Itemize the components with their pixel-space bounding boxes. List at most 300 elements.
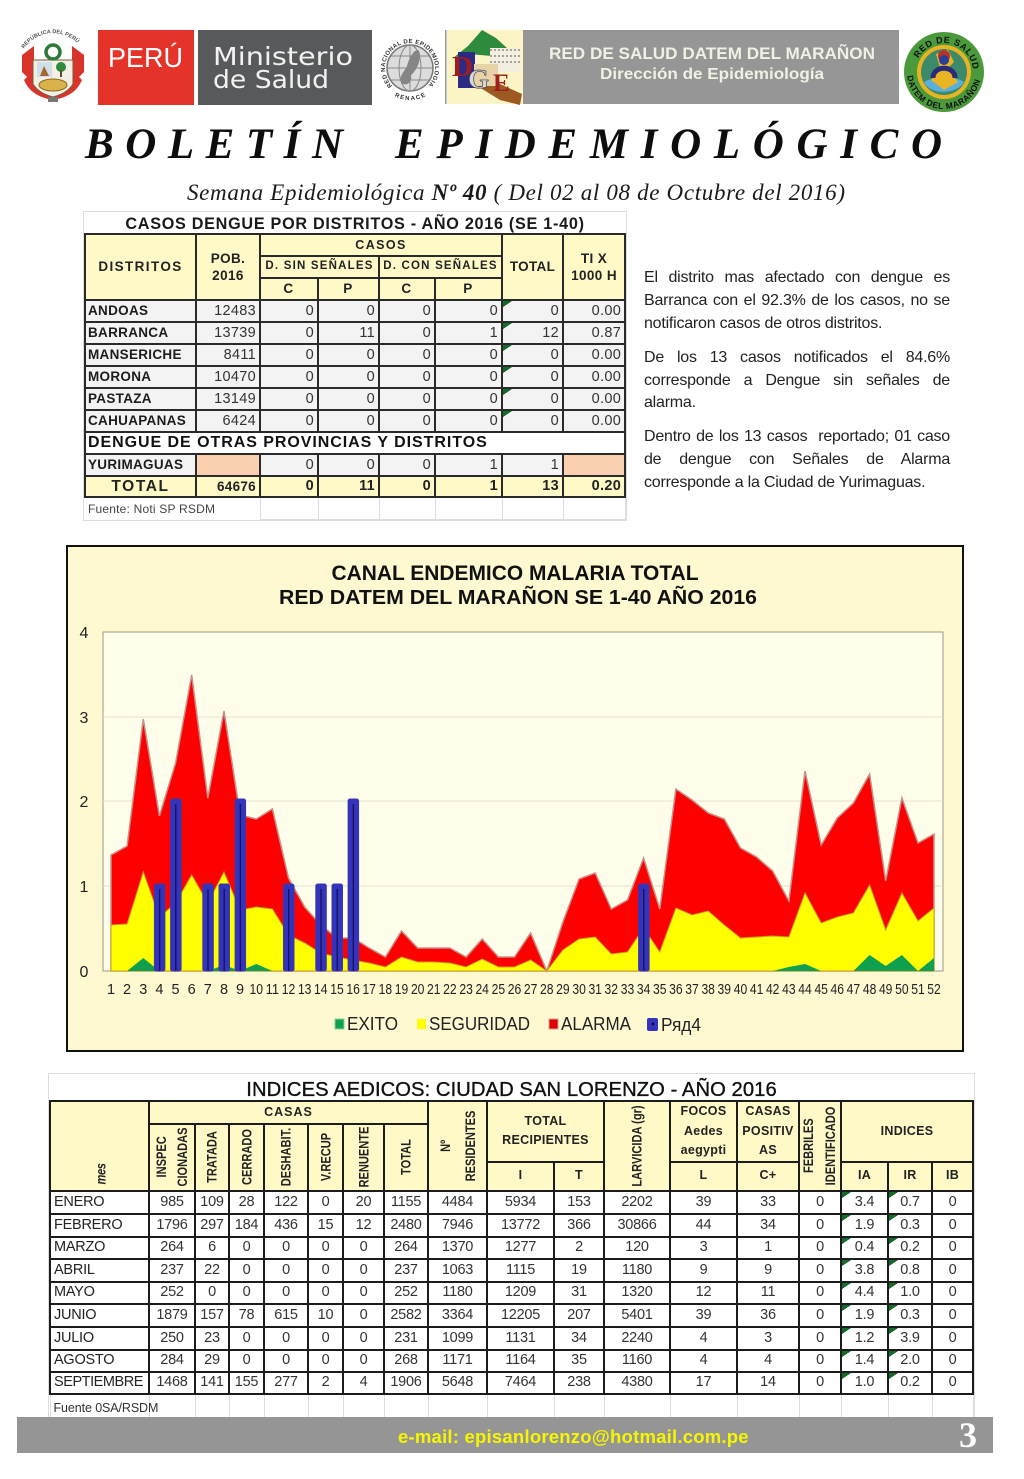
text block: dengue summary: Barranca con el 92.3% de los casos, no se [644, 292, 950, 309]
row: Pastaza: 0 [306, 391, 314, 407]
row: Febrero: 184 [235, 1217, 258, 1233]
row: Yurimaguas: 0 [367, 457, 375, 473]
row: Enero: 20 [356, 1194, 371, 1210]
source note: Fuente 0SA/RSDM [54, 1401, 158, 1415]
row: Julio: 3 [764, 1330, 772, 1346]
row: Junio: 0.3 [900, 1307, 920, 1323]
row: Andoas: 0 [423, 303, 431, 319]
row: Marzo: 2 [575, 1239, 583, 1255]
x axis labels: 14 [314, 982, 328, 998]
row: Enero: 2202 [621, 1194, 653, 1210]
row: Agosto: 35 [571, 1352, 587, 1368]
logo: RENACE seal [380, 30, 446, 104]
header row: groups: CASAS [745, 1104, 791, 1118]
table title: Nº [438, 1140, 452, 1152]
logo: RENACE seal: RED NACIONAL DE EPIDEMIOLOGIA [380, 38, 440, 88]
row: Manseriche: 0 [423, 347, 431, 363]
header logos and banner [21, 29, 984, 112]
row: Mayo: 1.0 [900, 1284, 920, 1300]
row: Febrero: 0 [816, 1217, 824, 1233]
header row: codes: T [575, 1168, 583, 1182]
row: Andoas: 0 [367, 303, 375, 319]
row: Pastaza: 0.00 [592, 391, 621, 407]
row: Manseriche [86, 345, 624, 365]
x axis labels: 29 [556, 982, 570, 998]
header row [86, 235, 624, 299]
row: Abril: 1115 [506, 1262, 535, 1278]
x axis labels: 22 [443, 982, 457, 998]
text block: dengue summary: De los 13 casos notificados el 84.6% [644, 349, 950, 366]
row: Pastaza: 0 [423, 391, 431, 407]
row: Manseriche: 0 [306, 347, 314, 363]
row: Abril: 237 [160, 1262, 184, 1278]
row: Abril: ABRIL [54, 1262, 95, 1278]
row: Marzo: 0 [243, 1239, 250, 1255]
header row: codes: IA [858, 1168, 871, 1182]
header row: CASOS [355, 238, 407, 252]
row: Junio: 1.9 [855, 1307, 874, 1323]
table title: aegypti [681, 1143, 726, 1157]
row: Morona: 0 [423, 369, 431, 385]
row: Febrero: 15 [318, 1217, 333, 1233]
row: Enero: 122 [274, 1194, 298, 1210]
row: Febrero: 12 [356, 1217, 371, 1233]
row: Manseriche: 8411 [224, 347, 256, 363]
table title: RESIDENTES [462, 1110, 478, 1181]
logo: Red de Salud Datem seal [904, 32, 984, 112]
row: Febrero: 0 [949, 1217, 956, 1233]
row: Enero: 1155 [391, 1194, 421, 1210]
x axis labels: 38 [701, 982, 715, 998]
row: Mayo: 1209 [505, 1284, 536, 1300]
email: e-mail: episanlorenzo@hotmail.com.pe [398, 1426, 749, 1447]
row: Agosto: 4 [764, 1352, 772, 1368]
x axis labels: 43 [782, 982, 796, 998]
row: Junio: 10 [318, 1307, 333, 1323]
table title: DISTRITOS [98, 259, 183, 274]
row: Cahuapanas: 0.00 [592, 413, 621, 429]
row: Septiembre: 1906 [390, 1374, 422, 1390]
row: Febrero: 297 [200, 1217, 224, 1233]
row: Septiembre: 14 [760, 1374, 776, 1390]
page number: 3 [959, 1415, 977, 1455]
row: Pastaza: 0 [367, 391, 375, 407]
row: Barranca: 12 [542, 325, 559, 341]
row: Marzo: 3 [700, 1239, 707, 1255]
title: EPIDEMIOLÓGICO [394, 121, 942, 168]
row: Mayo: 0 [282, 1284, 290, 1300]
row: Septiembre: 141 [200, 1374, 224, 1390]
row: Cahuapanas: 0 [306, 413, 314, 429]
row: Junio: 207 [567, 1307, 591, 1323]
row: Enero: 0 [949, 1194, 956, 1210]
row: Morona: 0 [551, 369, 559, 385]
table title: D. CON SEÑALES [383, 260, 498, 272]
row: Junio: 36 [760, 1307, 776, 1323]
table title: POB. [211, 251, 245, 266]
row: Septiembre: 7464 [505, 1374, 536, 1390]
x axis labels: 11 [266, 982, 279, 998]
table title: mes [94, 1163, 109, 1184]
x axis labels: 28 [540, 982, 554, 998]
row: Febrero: 2480 [390, 1217, 422, 1233]
row: Julio: 3.9 [900, 1330, 920, 1346]
table title: INDICES AEDICOS: CIUDAD SAN LORENZO - AÑO 2016 [246, 1079, 777, 1101]
y axis labels: 4 [80, 625, 89, 642]
header row: codes [488, 1163, 972, 1190]
row: Andoas: 0 [306, 303, 314, 319]
row: Morona: 0 [367, 369, 375, 385]
row: Febrero: 436 [274, 1217, 298, 1233]
row: Marzo: MARZO [54, 1239, 105, 1255]
row: Septiembre: 238 [567, 1374, 591, 1390]
row: Marzo: 0 [816, 1239, 824, 1255]
row: Mayo: 11 [761, 1284, 775, 1300]
legend [335, 1014, 701, 1035]
area: alarma [111, 675, 934, 971]
row: Enero: 0.7 [900, 1194, 920, 1210]
row: Barranca: 11 [359, 325, 375, 341]
header row: sub-columns: CERRADO [239, 1129, 254, 1185]
row: Morona: 0 [306, 369, 314, 385]
logo: Red de Salud Datem seal: RED DE SALUD [913, 36, 978, 68]
row: Febrero: 13772 [501, 1217, 540, 1233]
x axis labels: 31 [588, 982, 602, 998]
logo: Ministerio de Salud [198, 30, 372, 105]
row: Marzo [54, 1238, 956, 1255]
y axis labels: 3 [80, 710, 89, 727]
row: Julio [54, 1328, 956, 1346]
row: Septiembre: 4 [360, 1374, 367, 1390]
row: Septiembre [54, 1373, 956, 1390]
table: casos dengue por distritos [83, 211, 627, 521]
row: Enero: 0 [322, 1194, 329, 1210]
row: Marzo: 0 [322, 1239, 329, 1255]
row: Septiembre: 2 [322, 1374, 329, 1390]
legend: SEGURIDAD [429, 1014, 530, 1034]
row: Agosto: 0 [949, 1352, 956, 1368]
table title: 2016 [212, 268, 244, 283]
x axis labels: 27 [524, 982, 537, 998]
row: Agosto: 2.0 [900, 1352, 920, 1368]
header row: codes: I [519, 1168, 522, 1182]
row: total [86, 477, 624, 496]
row: Barranca: BARRANCA [88, 325, 168, 340]
row: Junio: 0 [360, 1307, 367, 1323]
row: Julio: 0 [282, 1330, 290, 1346]
row: Agosto: 0 [816, 1352, 824, 1368]
row: Marzo: 0.2 [900, 1239, 920, 1255]
x axis labels: 42 [766, 982, 779, 998]
row: Mayo: 12 [696, 1284, 711, 1300]
table title: D. SIN SEÑALES [265, 260, 374, 272]
table title [51, 1078, 972, 1415]
row: Agosto: 268 [394, 1352, 418, 1368]
table title: LARVICIDA (gr) [630, 1105, 644, 1186]
row: Junio: 39 [696, 1307, 711, 1323]
row: Septiembre: SEPTIEMBRE [54, 1374, 143, 1390]
icon: coat of arms of Peru: REPÚBLICA DEL PERÚ [21, 29, 80, 48]
bars: Ryad4 [154, 799, 649, 971]
row: Barranca [86, 323, 624, 343]
row: Cahuapanas: 0 [490, 413, 498, 429]
banner: Red de Salud: RED DE SALUD DATEM DEL MARAÑON [549, 43, 875, 63]
row: Abril: 1180 [622, 1262, 652, 1278]
chart title: CANAL ENDEMICO MALARIA TOTAL [332, 562, 699, 585]
row: Febrero: 44 [696, 1217, 711, 1233]
text block: dengue summary: El distrito mas afectado con dengue es [644, 269, 950, 286]
row: Julio: 4 [700, 1330, 707, 1346]
row: Julio: 1099 [442, 1330, 473, 1346]
x axis labels: 15 [330, 982, 344, 998]
row: Morona [86, 367, 624, 387]
row: Cahuapanas: 0 [551, 413, 559, 429]
header row: sub-columns: INSPEC [154, 1137, 169, 1178]
table title: POSITIV [742, 1124, 794, 1138]
x axis labels: 23 [459, 982, 473, 998]
table title: RECIPIENTES [502, 1133, 589, 1147]
row: Agosto: 4 [700, 1352, 707, 1368]
row: Junio: JUNIO [54, 1307, 96, 1323]
row: Septiembre: 0.2 [900, 1374, 920, 1390]
row: Septiembre: 5648 [442, 1374, 473, 1390]
logo: Red de Salud Datem seal: DATEM DEL MARAÑON [907, 75, 980, 110]
row: Yurimaguas: YURIMAGUAS [88, 457, 183, 472]
row: Cahuapanas [86, 411, 624, 431]
row: Manseriche: 0 [551, 347, 559, 363]
row: Mayo: 1320 [621, 1284, 653, 1300]
row: Yurimaguas: 0 [423, 457, 431, 473]
row: Julio: 1.2 [855, 1330, 874, 1346]
row: Julio: 0 [949, 1330, 956, 1346]
text block: dengue summary: corresponde a Dengue sin señales de [644, 372, 950, 389]
title [84, 120, 942, 168]
row: Junio: 5401 [621, 1307, 653, 1323]
row: Pastaza: 0 [490, 391, 498, 407]
header row: sub-columns: TOTAL [398, 1139, 414, 1175]
row: Barranca: 0 [306, 325, 314, 341]
x axis labels: 35 [653, 982, 667, 998]
y axis labels: 0 [80, 964, 89, 981]
row: total: 0 [423, 478, 431, 494]
row: Febrero: 34 [760, 1217, 776, 1233]
row: Barranca: 0 [423, 325, 431, 341]
text block: dengue summary: alarma. [644, 394, 696, 411]
row: Junio: 78 [239, 1307, 254, 1323]
header row: groups: FOCOS [681, 1104, 726, 1118]
subtitle: epidemiological week: Semana Epidemiológica Nº 40 ( Del 02 al 08 de Octubre del 2016) [187, 180, 845, 205]
row: Manseriche: 0 [367, 347, 375, 363]
row: Yurimaguas: 1 [490, 457, 498, 473]
row: Mayo: 252 [394, 1284, 418, 1300]
row: Mayo: 0 [243, 1284, 250, 1300]
row: Mayo: 0 [208, 1284, 216, 1300]
table title: Aedes [684, 1124, 723, 1138]
text block: dengue summary: notificaron casos de otros distritos. [644, 315, 882, 332]
x axis labels: 3 [139, 982, 147, 998]
section heading: otras provincias: DENGUE DE OTRAS PROVINCIAS Y DISTRITOS [88, 434, 488, 451]
row: Enero [54, 1192, 956, 1210]
row: Julio: 0 [322, 1330, 329, 1346]
row: Agosto: 0 [322, 1352, 329, 1368]
x axis labels: 40 [734, 982, 747, 998]
header row: codes: IR [903, 1168, 917, 1182]
row: Julio: 231 [394, 1330, 418, 1346]
row: Cahuapanas: 0 [423, 413, 431, 429]
row: Julio: 250 [160, 1330, 184, 1346]
x axis labels: 18 [379, 982, 392, 998]
row: Agosto: 0 [282, 1352, 290, 1368]
row: Mayo: MAYO [54, 1284, 95, 1300]
row: Marzo: 1277 [505, 1239, 536, 1255]
row: Julio: 34 [571, 1330, 587, 1346]
x axis labels: 21 [427, 982, 441, 998]
x axis labels: 46 [831, 982, 844, 998]
x axis labels: 24 [475, 982, 489, 998]
row: Enero: 109 [200, 1194, 224, 1210]
row: Marzo: 120 [625, 1239, 649, 1255]
row: Yurimaguas [86, 455, 624, 475]
row: Abril: 9 [764, 1262, 772, 1278]
x axis labels: 2 [123, 982, 131, 998]
row: Febrero [54, 1215, 956, 1233]
header row: codes: IB [946, 1168, 959, 1182]
chart title [279, 562, 757, 609]
row: Agosto: 29 [204, 1352, 220, 1368]
row: Marzo: 0.4 [855, 1239, 874, 1255]
row: Enero: 0 [816, 1194, 824, 1210]
row: Pastaza: PASTAZA [88, 391, 152, 406]
footer bar [17, 1417, 993, 1453]
text block: dengue summary: Dentro de los 13 casos reportado; 01 caso [644, 428, 950, 445]
row: total: 11 [359, 478, 375, 494]
x axis labels: 8 [220, 982, 228, 998]
row: Andoas: ANDOAS [88, 303, 148, 318]
header row: sub-columns [150, 1125, 427, 1190]
text block: dengue summary: corresponde a la Ciudad de Yurimaguas. [644, 474, 925, 491]
logo: DGE map [447, 30, 523, 105]
row: total: 64676 [217, 479, 256, 494]
row: Pastaza: 13149 [214, 391, 256, 407]
x axis labels: 10 [250, 982, 263, 998]
row: Enero: 33 [760, 1194, 776, 1210]
row: Andoas [86, 301, 624, 321]
x axis labels: 5 [172, 982, 180, 998]
row: Septiembre: 0 [816, 1374, 824, 1390]
x axis labels: 4 [155, 982, 163, 998]
row: Abril: 0 [282, 1262, 290, 1278]
logo: Perú red box [98, 30, 194, 105]
row: Agosto: 0 [360, 1352, 367, 1368]
row: Marzo: 0 [282, 1239, 290, 1255]
row: Enero: ENERO [54, 1194, 104, 1210]
row: Barranca: 13739 [214, 325, 256, 341]
row: Enero: 5934 [505, 1194, 536, 1210]
header row: sub-columns: DESHABIT. [278, 1128, 294, 1186]
row: Marzo: 0 [949, 1239, 956, 1255]
row: Abril: 237 [394, 1262, 418, 1278]
row: Enero: 985 [160, 1194, 184, 1210]
row: Mayo: 252 [160, 1284, 184, 1300]
chart title: RED DATEM DEL MARAÑON SE 1-40 AÑO 2016 [279, 586, 757, 609]
x axis labels: 52 [927, 982, 941, 998]
row: Septiembre: 0 [949, 1374, 956, 1390]
row: Mayo: 0 [949, 1284, 956, 1300]
row: total: 1 [490, 478, 498, 494]
x axis labels: 39 [718, 982, 731, 998]
area: exito [127, 955, 934, 971]
row: total: 13 [542, 478, 559, 494]
row: Julio: JULIO [54, 1330, 94, 1346]
row: Abril: 22 [204, 1262, 220, 1278]
row: Abril [54, 1260, 956, 1278]
row: Abril: 0 [360, 1262, 367, 1278]
text block: dengue summary [644, 269, 950, 491]
row: Andoas: 0.00 [592, 303, 621, 319]
row: Junio: 12205 [501, 1307, 540, 1323]
chart panel: canal endemico malaria [66, 545, 964, 1052]
row: Marzo: 264 [160, 1239, 184, 1255]
table title: TI X [581, 251, 607, 266]
row: Yurimaguas: 1 [551, 457, 559, 473]
header row: sub-columns: CIONADAS [175, 1128, 190, 1187]
x axis labels: 37 [685, 982, 699, 998]
x axis labels: 7 [204, 982, 212, 998]
row: Febrero: 7946 [442, 1217, 473, 1233]
x axis labels: 9 [236, 982, 244, 998]
table title: FEBRILES [801, 1118, 816, 1173]
row: total: TOTAL [111, 478, 170, 495]
header row: sub-columns: RENUENTE [356, 1127, 371, 1188]
x axis labels [107, 982, 941, 998]
row: Morona: 0.00 [592, 369, 621, 385]
row: Febrero: 1.9 [855, 1217, 874, 1233]
x axis labels: 34 [637, 982, 650, 998]
logo: DGE map: D [452, 51, 473, 83]
legend: EXITO [347, 1014, 398, 1034]
row: Julio: 0 [360, 1330, 367, 1346]
header row: sub-columns: V.RECUP [318, 1133, 333, 1181]
row: Mayo: 0 [816, 1284, 824, 1300]
source note: Fuente: Noti SP RSDM [88, 502, 215, 516]
row: Pastaza: 0 [551, 391, 559, 407]
x axis labels: 17 [362, 982, 376, 998]
x axis labels: 50 [895, 982, 909, 998]
x axis labels: 6 [188, 982, 196, 998]
row: Febrero: 1796 [156, 1217, 188, 1233]
row: Septiembre: 1468 [156, 1374, 188, 1390]
row: Enero: 3.4 [855, 1194, 874, 1210]
row: Andoas: 0 [551, 303, 559, 319]
x axis labels: 25 [492, 982, 505, 998]
row: Junio: 0 [949, 1307, 956, 1323]
row: Marzo: 1 [764, 1239, 772, 1255]
header row: sub-columns: TRATADA [204, 1131, 220, 1183]
x axis labels: 47 [847, 982, 860, 998]
header row: codes: C+ [760, 1168, 776, 1182]
logo: DGE map: E [493, 70, 510, 97]
row: Marzo: 1370 [442, 1239, 473, 1255]
row: Enero: 39 [696, 1194, 711, 1210]
header row: groups [51, 1102, 972, 1190]
row: Manseriche: 0.00 [592, 347, 621, 363]
row: Andoas: 12483 [214, 303, 256, 319]
row: Pastaza [86, 389, 624, 409]
x axis labels: 13 [298, 982, 311, 998]
table title: P [463, 281, 474, 296]
row: Enero: 153 [567, 1194, 591, 1210]
table title: AS [759, 1143, 777, 1157]
